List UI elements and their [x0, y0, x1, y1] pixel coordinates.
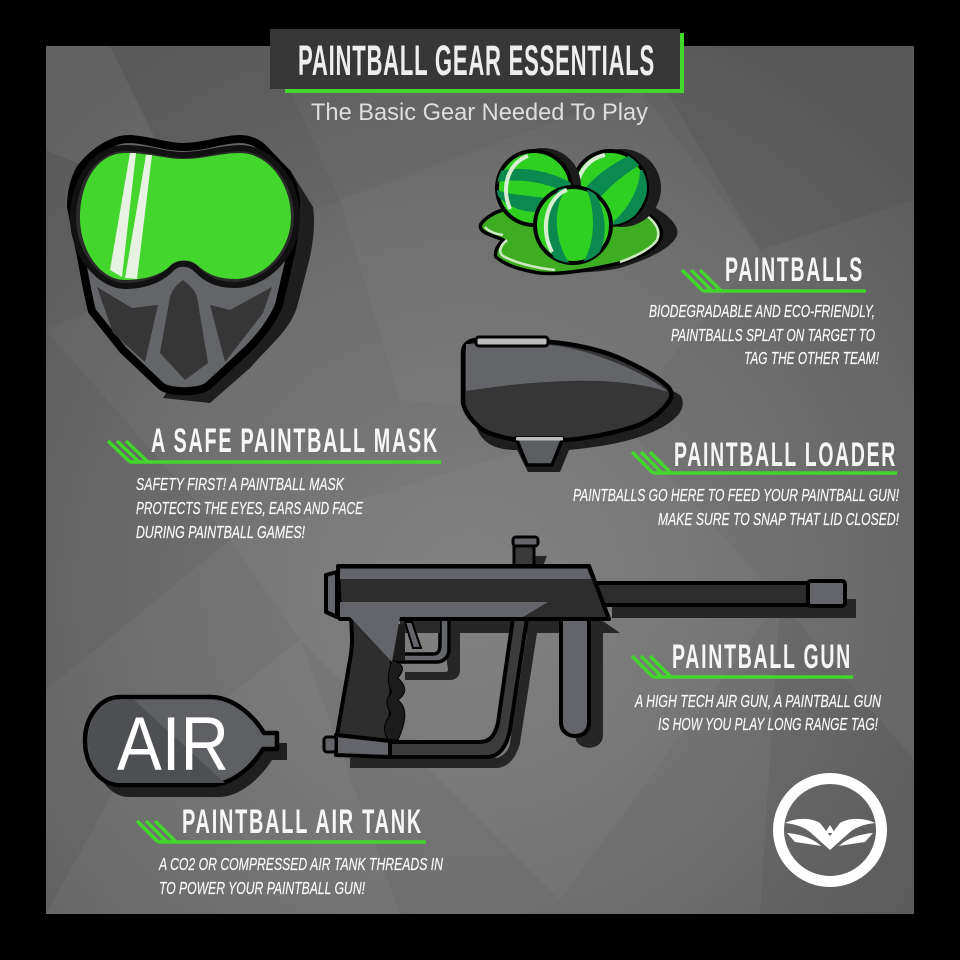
section: paintballs label [649, 251, 879, 368]
lens stripes [110, 153, 152, 279]
section: paintball mask label: A SAFE PAINTBALL MASK [151, 422, 439, 460]
ball back right [573, 149, 661, 228]
splat shadow [510, 205, 677, 273]
trigger guard [392, 618, 449, 662]
air label: AIR [117, 702, 229, 787]
feed neck [514, 546, 534, 568]
gun butt plate [336, 735, 390, 757]
section: paintball mask label: SAFETY FIRST! A PAINTBALL MASK [136, 474, 345, 494]
icon: paintballs [480, 148, 677, 273]
rear cap [326, 572, 337, 617]
icon: paintball mask [71, 139, 314, 403]
forward grip [561, 618, 589, 736]
grip scallops [384, 660, 405, 740]
icon: paintball gun [324, 537, 856, 768]
section: loader label [573, 436, 899, 529]
section: air tank label: A CO2 OR COMPRESSED AIR TANK THREADS IN [158, 854, 443, 874]
icon: air tank [85, 697, 287, 797]
section: air tank label: PAINTBALL AIR TANK [182, 803, 423, 841]
barrel [595, 583, 809, 605]
frame tube [388, 618, 527, 757]
paint splat [480, 210, 662, 273]
mask vents [97, 280, 272, 380]
logo [778, 778, 882, 882]
loader feed neck [516, 438, 563, 465]
hand grip [337, 618, 395, 741]
section: paintball mask label [108, 422, 441, 542]
section: gun label [632, 638, 881, 734]
goggle lens [80, 153, 291, 280]
loader lid [476, 337, 548, 346]
goggle frame [73, 148, 297, 286]
section: air tank label: TO POWER YOUR PAINTBALL GUN! [159, 878, 365, 898]
title banner [270, 29, 684, 93]
subtitle: The Basic Gear Needed To Play [311, 99, 648, 126]
gun body [338, 566, 609, 619]
section: paintball mask label: DURING PAINTBALL GAMES! [136, 522, 305, 542]
icon: paintball loader [463, 337, 683, 472]
ball back left [495, 148, 581, 225]
gun shadow [350, 556, 856, 768]
ball front [535, 187, 611, 264]
section: air tank label [137, 803, 443, 898]
section: paintballs label: TAG THE OTHER TEAM! [744, 348, 879, 368]
section: paintball mask label: PROTECTS THE EYES, EARS AND FACE [136, 498, 363, 518]
